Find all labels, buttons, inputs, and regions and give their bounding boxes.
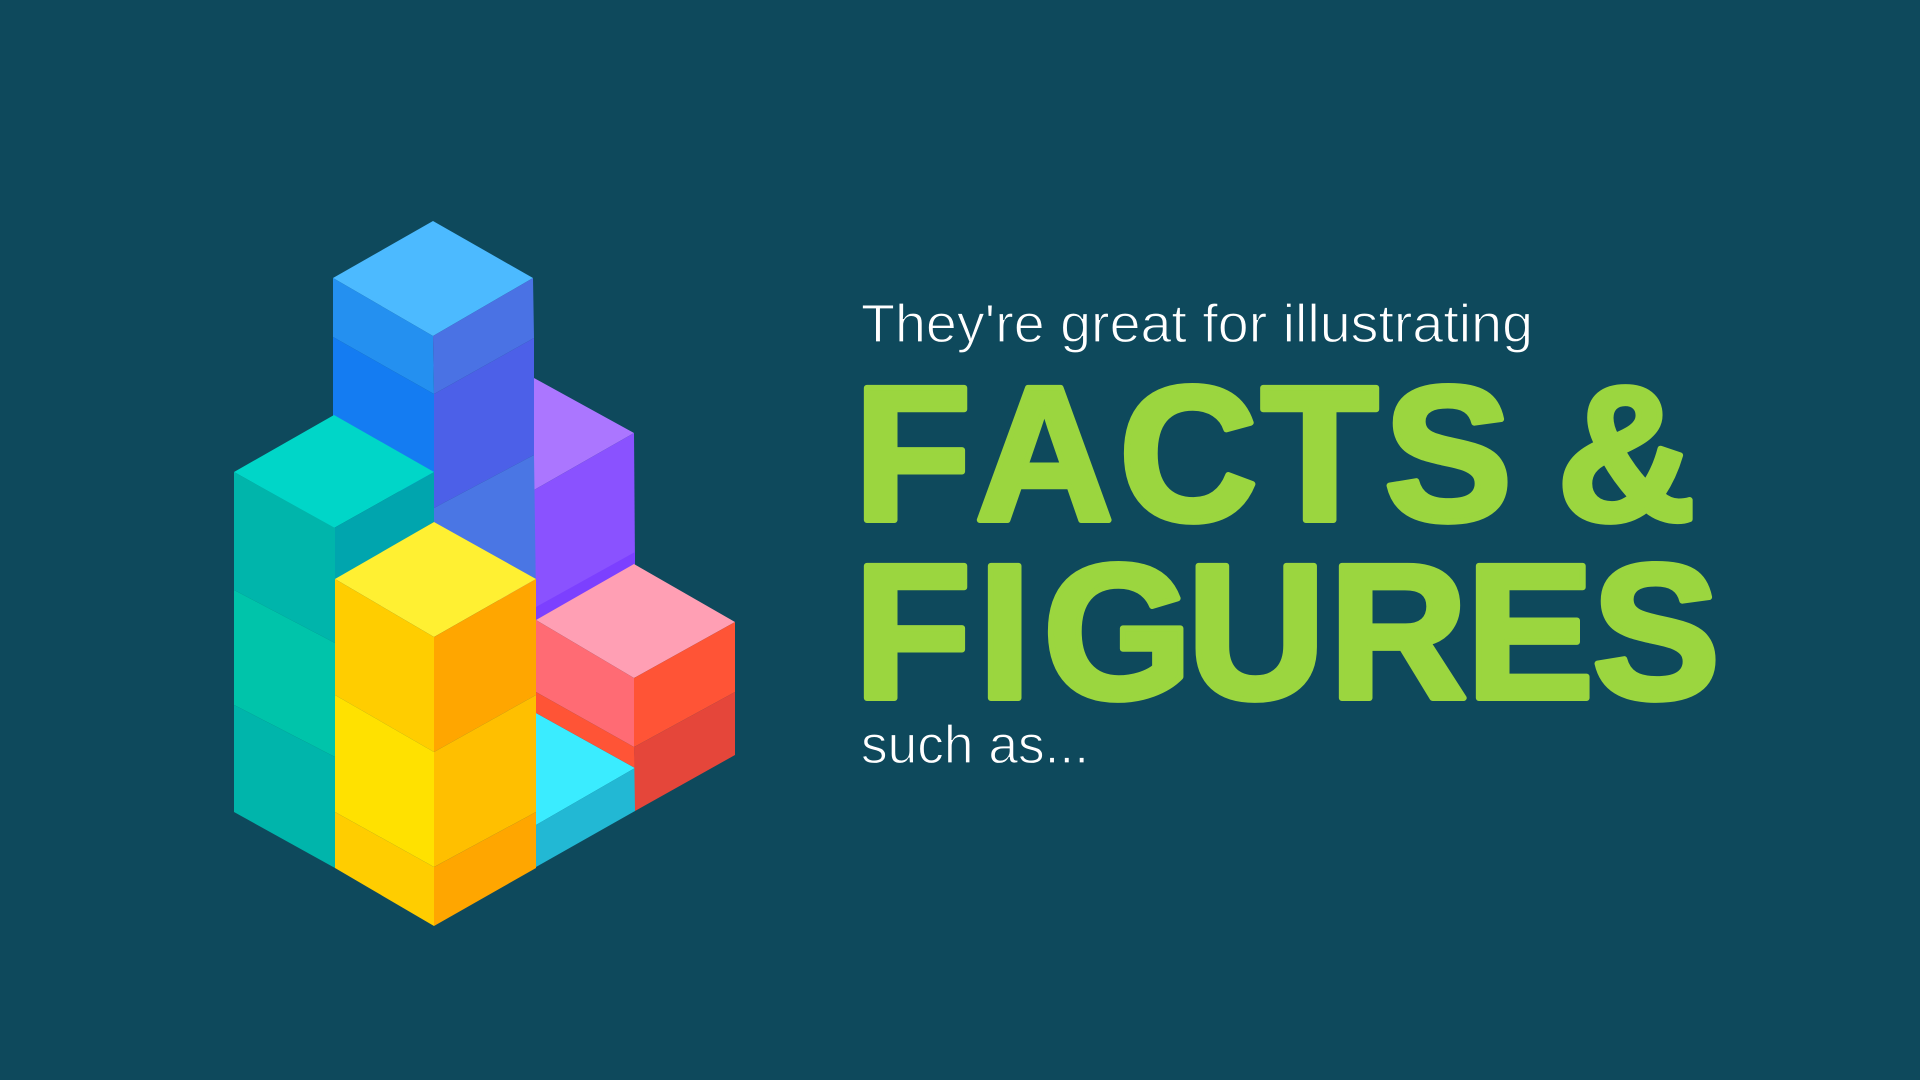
- text: intro line: They're great for illustrating: [861, 294, 1533, 354]
- blue column: [333, 221, 536, 600]
- yellow column: [335, 522, 536, 926]
- heading: FACTS &: FACTS&: [854, 346, 1696, 561]
- heading: FIGURES: FIGURES: [854, 524, 1720, 739]
- cyan block: [536, 713, 635, 867]
- teal column: [234, 415, 434, 868]
- purple column: [534, 378, 635, 620]
- text: closing line: such as...: [861, 715, 1089, 775]
- red and pink column: [536, 564, 735, 811]
- icon: isometric block chart: [234, 221, 735, 926]
